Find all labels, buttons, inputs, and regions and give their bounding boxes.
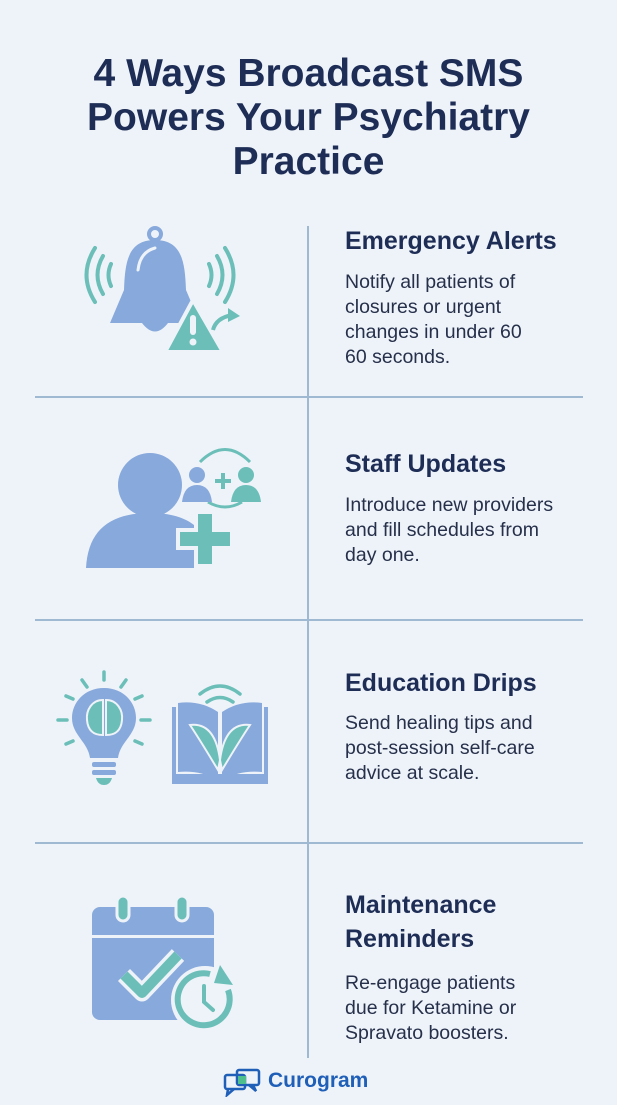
icon: lightbulb and book bbox=[56, 670, 268, 785]
title bbox=[87, 52, 530, 183]
panel: education drips bbox=[56, 669, 537, 785]
text: education body: post-session self-care bbox=[345, 737, 535, 759]
text: education body: advice at scale. bbox=[345, 762, 479, 784]
heading: Maintenance Reminders: Reminders bbox=[345, 925, 474, 953]
heading: Staff Updates: Staff Updates bbox=[345, 450, 506, 478]
text: staff body bbox=[345, 494, 553, 566]
text: maintenance body bbox=[345, 972, 516, 1044]
text: emergency body: Notify all patients of bbox=[345, 271, 515, 293]
text: emergency body: changes in under 60 bbox=[345, 321, 522, 343]
title: 4 Ways Broadcast SMS bbox=[94, 52, 523, 95]
heading: Education Drips: Education Drips bbox=[345, 669, 537, 697]
icon: bell with warning bbox=[84, 226, 240, 350]
title: Powers Your Psychiatry bbox=[87, 96, 530, 139]
text: staff body: and fill schedules from bbox=[345, 519, 539, 541]
heading: Maintenance Reminders: Maintenance bbox=[345, 891, 496, 919]
title: Practice bbox=[233, 140, 384, 183]
text: emergency body bbox=[345, 271, 522, 368]
text: emergency body: 60 seconds. bbox=[345, 346, 450, 368]
text: education body bbox=[345, 712, 535, 784]
panel: emergency alerts bbox=[84, 226, 557, 368]
text: maintenance body: Re-engage patients bbox=[345, 972, 515, 994]
text: maintenance body: due for Ketamine or bbox=[345, 997, 516, 1019]
panel: staff updates bbox=[86, 448, 553, 568]
logo: Curogram bbox=[224, 1068, 368, 1097]
icon: people with plus bbox=[86, 448, 261, 568]
text: emergency body: closures or urgent bbox=[345, 296, 501, 318]
text: staff body: day one. bbox=[345, 544, 420, 566]
logo: Curogram: Curogram bbox=[268, 1069, 368, 1092]
heading: Emergency Alerts: Emergency Alerts bbox=[345, 227, 557, 255]
heading: Maintenance Reminders bbox=[345, 891, 496, 953]
text: maintenance body: Spravato boosters. bbox=[345, 1022, 509, 1044]
panel: maintenance reminders bbox=[92, 891, 516, 1044]
text: education body: Send healing tips and bbox=[345, 712, 533, 734]
icon: calendar with clock bbox=[92, 898, 233, 1028]
text: staff body: Introduce new providers bbox=[345, 494, 553, 516]
